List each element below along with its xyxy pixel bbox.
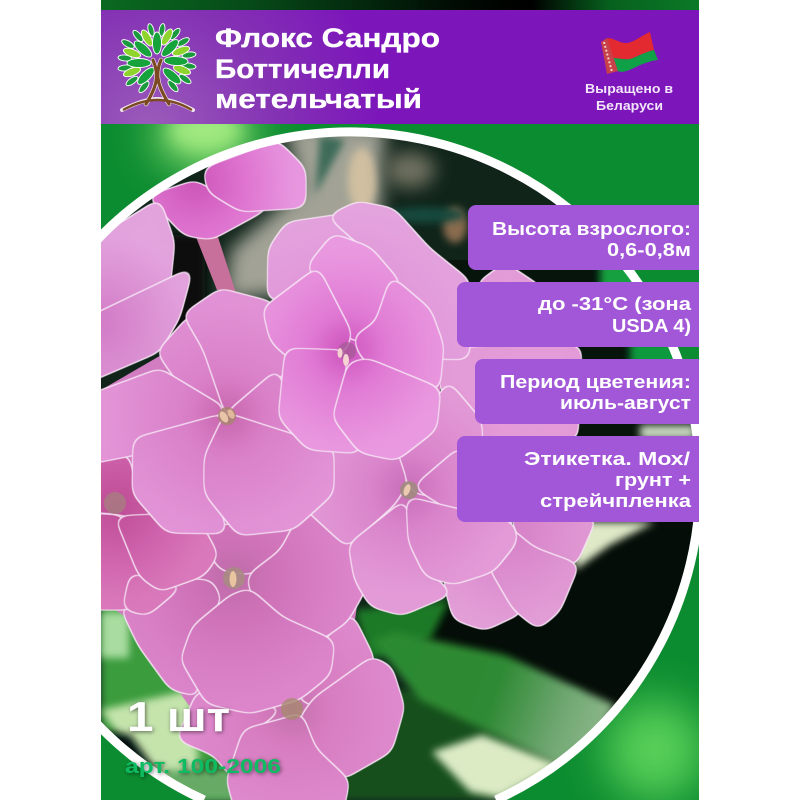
- flower: center right: [300, 380, 520, 616]
- quantity label: 1 шт: [127, 693, 230, 740]
- title: Флокс Сандро: [215, 23, 440, 53]
- infographic canvas: [101, 0, 699, 800]
- title: метельчатый: [215, 84, 422, 114]
- panel: bloom period: июль-август: [560, 392, 691, 413]
- flower: middle center: [262, 233, 444, 461]
- page: product card: [101, 0, 699, 800]
- panel: height: 0,6-0,8м: [607, 239, 691, 260]
- panel: packaging: [457, 436, 707, 522]
- panel: packaging: грунт +: [615, 469, 691, 490]
- flower centres: [104, 342, 418, 720]
- flower: left upper: [101, 202, 191, 378]
- logo: tree: [118, 23, 196, 110]
- flower: middle left: [101, 289, 335, 536]
- panel: hardiness: до -31°C (зона: [538, 293, 692, 314]
- flower: lower right: [442, 516, 598, 631]
- text: grown in Belarus: Беларуси: [596, 98, 663, 113]
- pale leaf tip: [432, 735, 560, 798]
- panel: bloom period: [475, 359, 710, 424]
- header band: [101, 10, 699, 124]
- flower: lower-left-centre: [122, 523, 364, 714]
- tree crown: [118, 23, 196, 94]
- flower: top bud: [146, 140, 306, 240]
- photo: phlox flowers in circle: [101, 136, 694, 800]
- text: grown in Belarus: Выращено в: [585, 81, 673, 96]
- panel: hardiness: [457, 282, 707, 347]
- flower: center-upper back petals: [267, 201, 470, 360]
- panel: hardiness: USDA 4): [612, 315, 691, 336]
- panel: height: Высота взрослого:: [492, 218, 691, 239]
- panel: packaging: стрейчпленка: [540, 490, 692, 511]
- stem: [196, 234, 236, 293]
- green leaf: [372, 632, 615, 765]
- photo background: [101, 136, 694, 800]
- lower left foliage: [101, 610, 231, 800]
- flower: left dark pink: [101, 457, 217, 615]
- title: Боттичелли: [215, 54, 390, 84]
- text: grown in Belarus: [586, 84, 672, 112]
- cluster underlay: [103, 356, 440, 706]
- panel: height: [468, 205, 708, 270]
- white circle outline: [101, 127, 699, 800]
- title: [216, 28, 439, 108]
- flower: rear right pale: [440, 270, 582, 436]
- outer green background: [101, 124, 699, 800]
- icon: Belarus flag: [601, 32, 658, 74]
- tree trunk: [122, 60, 193, 110]
- flower: bottom: [176, 612, 405, 800]
- top strip: [101, 0, 699, 10]
- panel: bloom period: Период цветения:: [500, 371, 691, 392]
- article number: арт. 100-2006: [125, 756, 281, 778]
- panel: packaging: Этикетка. Мох/: [524, 448, 690, 469]
